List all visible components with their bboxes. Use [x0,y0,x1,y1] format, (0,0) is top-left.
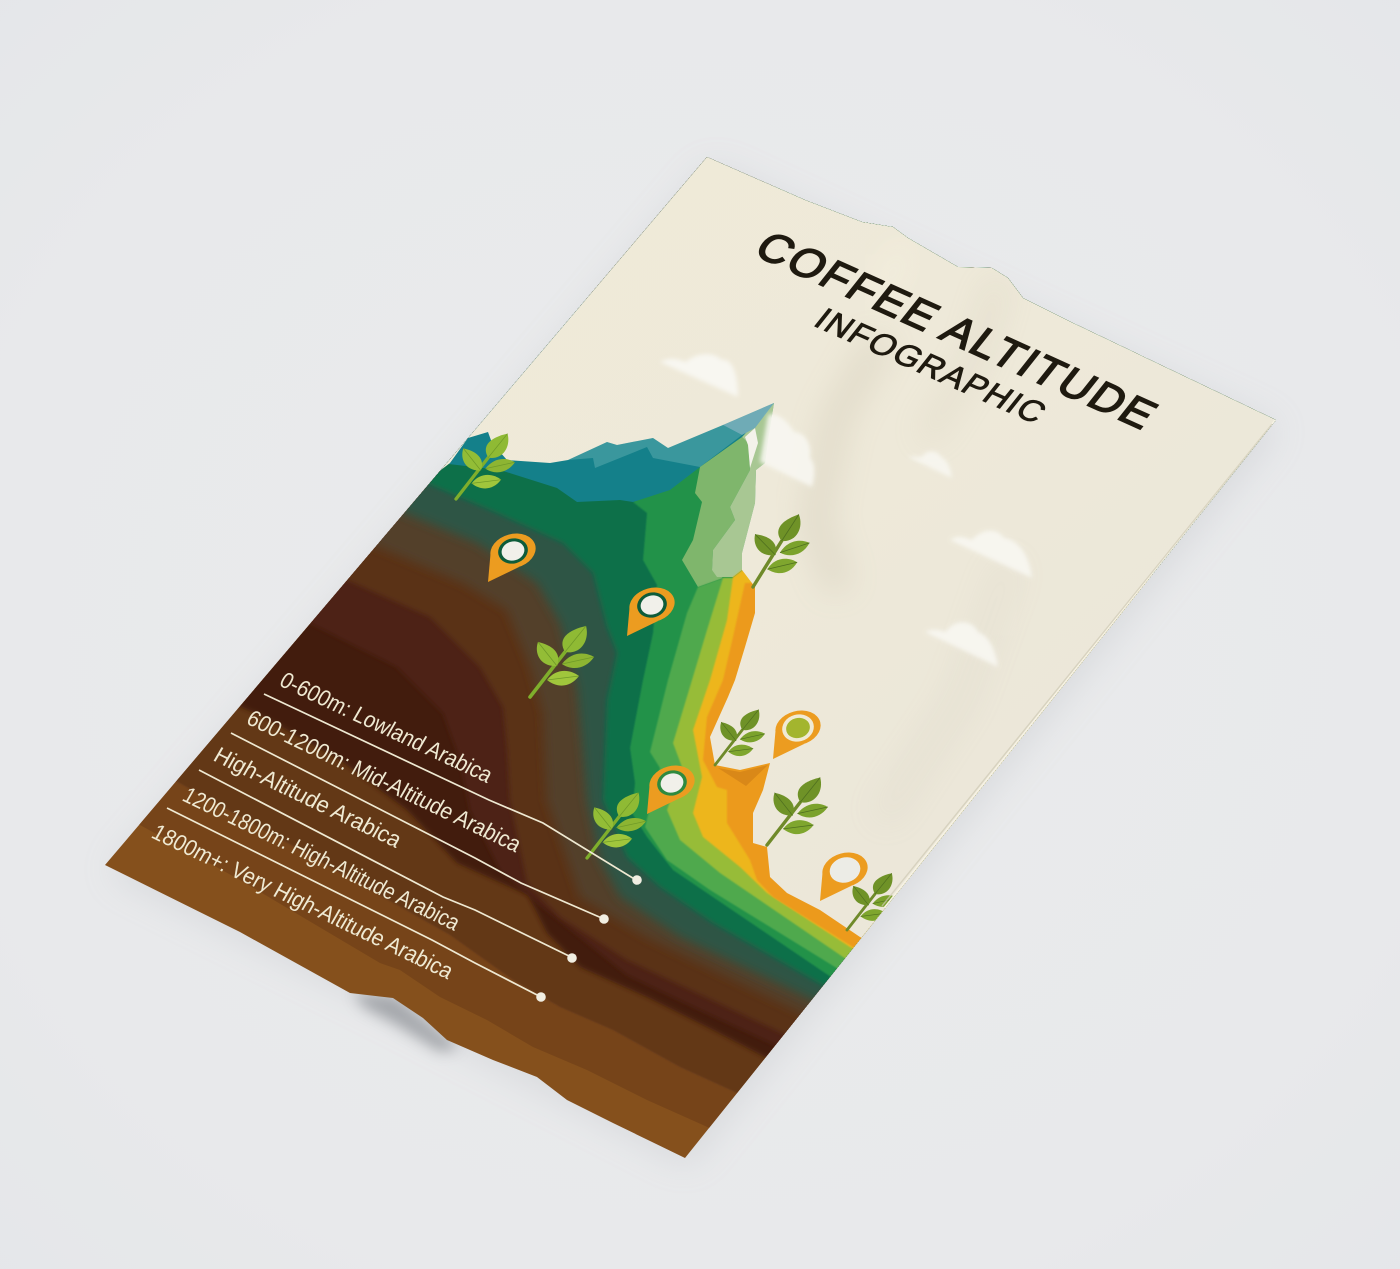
map pin 4 [771,706,825,759]
mountain: snow patch [745,428,758,468]
band: lime [666,577,861,959]
arc: dark brown [310,160,1276,1045]
poster [105,157,1276,1158]
arc: dark olive green [402,158,1272,1002]
band: mid green [630,187,1276,976]
leader 1 [264,694,642,885]
mountain: teal ridge [446,300,774,502]
mountain: peak tip [723,403,774,435]
arc: olive brown [376,178,813,1014]
poster title [746,224,1166,438]
leader 3 [199,770,577,963]
arc: dark green [428,157,1276,987]
map pin 5 [818,848,872,901]
cloud 2 [760,414,814,487]
sprig 6 [767,778,828,845]
label 1: 0-600m: Lowland Arabica [275,667,498,788]
fold shadow under bottom edge [352,992,460,1052]
map pin 2 [625,583,679,636]
arc: brown [348,160,1274,1034]
sprig 3 [746,514,813,587]
soil band 2 [139,160,1274,1128]
sprig 7 [847,873,898,930]
map pin 1 [486,529,540,582]
map pin 3 [645,761,699,814]
label 5: 1800m+: Very High-Altitude Arabica [148,819,458,984]
paper shadow [109,165,1280,1166]
cloud 3 [912,451,952,477]
label 3: High-Altitude Arabica [210,742,407,853]
band: yellow [692,569,1152,949]
sprig 1 [456,434,515,499]
sprig 4 [587,793,646,858]
mountain: light teal highlights [568,425,742,468]
sprig 2 [530,626,594,697]
subheading: INFOGRAPHIC [808,302,1054,430]
cloud 4 [950,531,1032,578]
leader 2 [231,733,609,924]
label 4: 1200-1800m: High-Altitude Arabica [179,782,465,935]
soil band 3 [176,160,1274,1093]
mountain: pale sage slope [712,403,774,577]
label 2: 600-1200m: Mid-Altitude Arabica [243,705,526,857]
orange shadow facet [718,765,768,786]
heading: COFFEE ALTITUDE [746,224,1166,438]
sprig 5 [715,710,765,765]
soil band: lowest [105,160,1205,1158]
band: green [644,578,852,968]
leader 4 [167,808,546,1002]
soil band 4: darkest core [239,160,1276,1059]
fabric fold shading [806,351,878,578]
band: orange [702,582,1146,948]
cloud 1 [660,354,738,397]
cream paper sky [440,157,1276,938]
altitude labels [148,667,642,1002]
cloud 5 [925,622,998,667]
mountain: sage slope [682,437,750,587]
right hem [882,420,1276,908]
